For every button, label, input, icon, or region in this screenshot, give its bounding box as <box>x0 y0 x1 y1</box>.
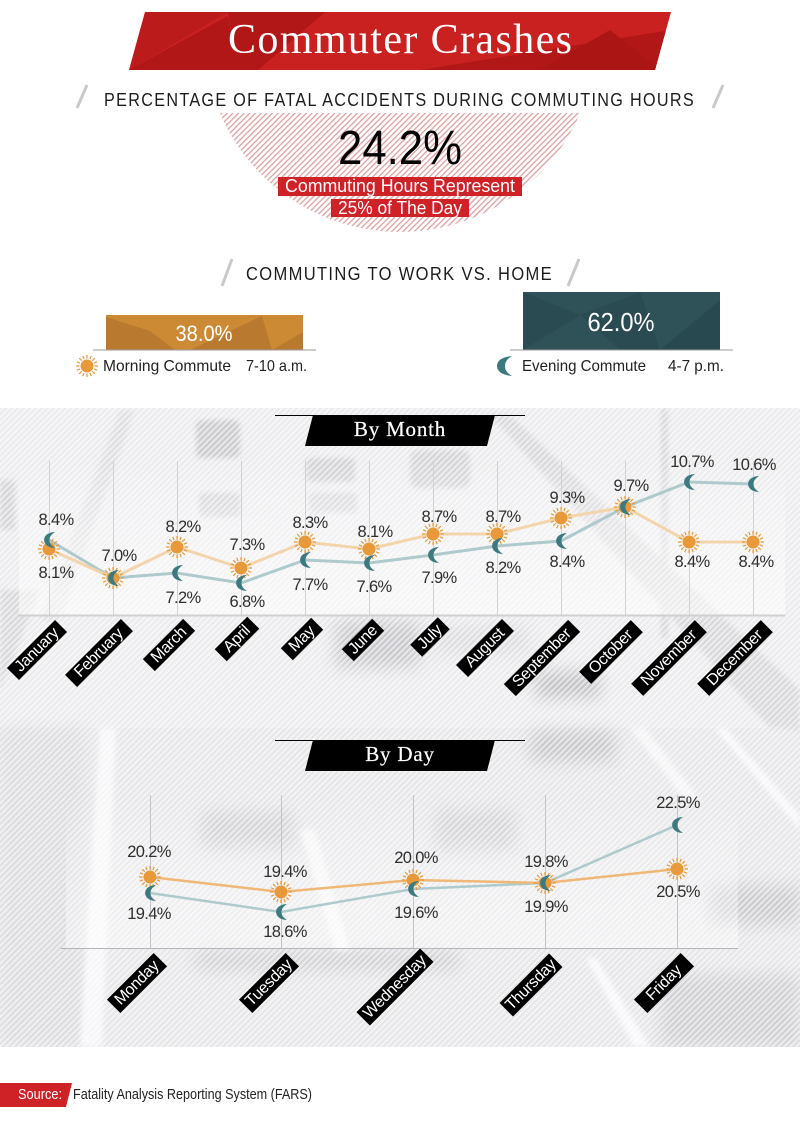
markers: morning by day <box>139 858 688 903</box>
heading: commuting to work vs home: COMMUTING TO WORK VS. HOME <box>246 263 553 284</box>
month labels: July <box>414 621 446 653</box>
values: by month: 8.4% <box>738 553 774 571</box>
values: by month: 8.2% <box>485 559 521 577</box>
section heading: by month <box>275 415 525 446</box>
chart: by day <box>61 794 738 1026</box>
month labels <box>7 617 773 696</box>
values: by month: 10.7% <box>670 453 715 471</box>
line: evening by day <box>150 825 677 912</box>
month labels: May <box>286 622 319 655</box>
month labels: March <box>148 624 190 666</box>
values: by day <box>127 794 701 941</box>
values: by month: 8.4% <box>549 553 585 571</box>
values: by day: 20.5% <box>656 883 701 901</box>
evening commute bar: 62.0% <box>588 307 654 337</box>
title banner: Commuter Crashes <box>228 17 572 63</box>
month labels: January <box>12 624 63 675</box>
values: by month: 8.1% <box>38 564 74 582</box>
month labels: February <box>71 625 127 681</box>
values: by day: 18.6% <box>263 923 308 941</box>
day labels <box>107 948 694 1026</box>
evening commute bar <box>510 292 733 350</box>
heading: percentage of fatal accidents: PERCENTAGE OF FATAL ACCIDENTS DURING COMMUTING HOURS <box>104 89 695 110</box>
values: by month: 8.7% <box>485 508 521 526</box>
values: by month: 7.6% <box>356 578 392 596</box>
day labels: Monday <box>111 957 163 1009</box>
morning commute bar: 38.0% <box>176 321 232 346</box>
day labels: Friday <box>643 962 685 1004</box>
day labels: Tuesday <box>242 956 296 1010</box>
section heading: by day: By Day <box>365 742 435 766</box>
legend: evening: Evening Commute <box>522 358 646 375</box>
chart: by month <box>7 453 785 696</box>
month labels: December <box>704 626 767 689</box>
legend: morning: 7-10 a.m. <box>246 358 307 375</box>
values: by month: 7.2% <box>165 589 201 607</box>
values: by day: 19.8% <box>524 853 569 871</box>
values: by month: 8.4% <box>38 511 74 529</box>
values: by month: 7.3% <box>229 536 265 554</box>
values: by day: 22.5% <box>656 794 701 812</box>
section heading: by month: By Month <box>354 417 446 441</box>
values: by month: 7.0% <box>101 547 137 565</box>
values: by month: 9.3% <box>549 489 585 507</box>
month labels: November <box>638 626 701 689</box>
red note: commuting hours: 25% of The Day <box>338 198 462 218</box>
values: by month: 7.9% <box>421 569 457 587</box>
hatched semicircle with 24.2 percent <box>220 113 580 232</box>
values: by day: 19.9% <box>524 898 569 916</box>
values: by month: 6.8% <box>229 593 265 611</box>
values: by month: 7.7% <box>292 576 328 594</box>
values: by month: 8.4% <box>674 553 710 571</box>
values: by month: 8.2% <box>165 518 201 536</box>
legend: morning: Morning Commute <box>103 358 231 375</box>
markers: evening by month <box>44 474 758 590</box>
values: by day: 19.4% <box>127 905 172 923</box>
markers: evening by day <box>146 818 682 920</box>
values: by day: 19.6% <box>394 904 439 922</box>
values: by month: 8.1% <box>357 523 393 541</box>
legend: evening: 4-7 p.m. <box>668 358 724 375</box>
day labels: Thursday <box>502 956 560 1014</box>
values: by month <box>38 453 777 611</box>
values: by day: 20.0% <box>394 849 439 867</box>
month labels: August <box>462 624 509 671</box>
month labels: June <box>345 622 381 658</box>
day labels: Wednesday <box>360 952 430 1022</box>
values: by month: 10.6% <box>732 456 777 474</box>
values: by month: 8.7% <box>421 508 457 526</box>
red note: commuting hours: Commuting Hours Represent <box>285 176 515 196</box>
line: evening by month <box>49 482 753 583</box>
red note: commuting hours <box>278 176 522 218</box>
values: by month: 9.7% <box>613 477 649 495</box>
line: morning by month <box>49 507 753 578</box>
month labels: April <box>220 622 254 656</box>
section heading: by day <box>275 740 525 771</box>
legend: evening <box>497 356 724 376</box>
month labels: September <box>509 625 575 691</box>
legend: morning <box>76 355 307 377</box>
road photo background <box>0 408 800 1048</box>
line: morning by day <box>150 869 677 892</box>
source note: Fatality Analysis Reporting System (FARS) <box>73 1086 312 1103</box>
morning commute bar <box>93 315 316 350</box>
title banner <box>129 12 671 70</box>
values: by day: 20.2% <box>127 843 172 861</box>
values: by day: 19.4% <box>263 863 308 881</box>
values: by month: 8.3% <box>292 514 328 532</box>
source note: Source: <box>18 1086 62 1103</box>
statistic: 24.2% <box>338 122 462 175</box>
month labels: October <box>586 626 637 677</box>
markers: morning by month <box>38 496 764 589</box>
source note <box>0 1083 312 1107</box>
